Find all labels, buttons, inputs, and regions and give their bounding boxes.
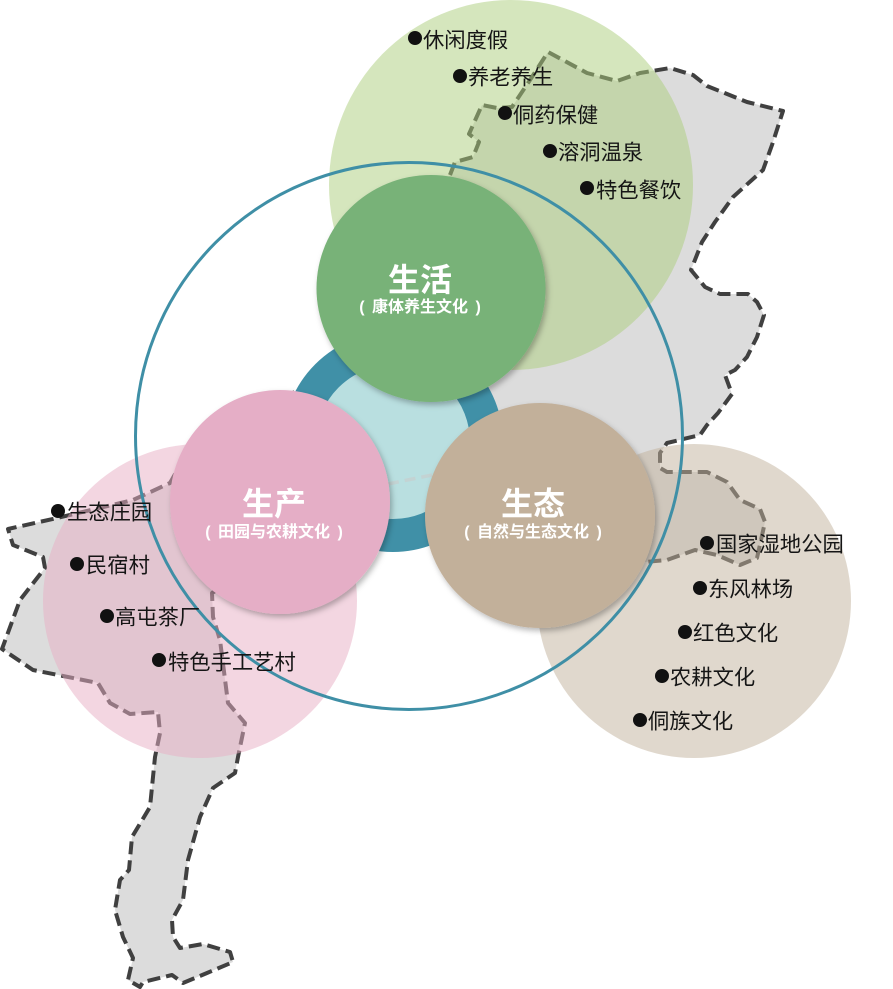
pink main circle: [170, 390, 390, 614]
list: ecology items: 侗族文化: [648, 710, 733, 734]
list: ecology items: [633, 532, 844, 734]
subheading: 田园与农耕文化: ( 田园与农耕文化 ): [205, 522, 343, 541]
list: living items: 溶洞温泉: [558, 140, 643, 164]
large teal ring: [136, 162, 682, 710]
list: living items: 休闲度假: [423, 28, 508, 52]
light pink circle: production zone: [43, 444, 357, 758]
central teal ring and disc: [300, 348, 486, 536]
list: living items: 特色餐饮: [596, 178, 681, 202]
heading: 生活: 生活: [388, 262, 452, 298]
list: ecology items: 国家湿地公园: [716, 532, 844, 556]
list: living items: 侗药保健: [513, 104, 598, 128]
tan main circle: [425, 403, 655, 628]
heading: 生产: 生产: [242, 486, 306, 522]
green main circle: [316, 175, 546, 402]
list: production items: 民宿村: [86, 554, 150, 578]
list: production items: 生态庄园: [67, 500, 152, 524]
list: production items: 高屯茶厂: [115, 606, 200, 630]
list: living items: 养老养生: [468, 66, 553, 90]
list: ecology items: 红色文化: [693, 622, 778, 646]
subheading: 自然与生态文化: ( 自然与生态文化 ): [464, 522, 602, 541]
subheading: 康体养生文化: ( 康体养生文化 ): [359, 297, 481, 316]
list: production items: [51, 500, 296, 674]
light tan circle: ecology zone: [537, 444, 851, 758]
list: ecology items: 农耕文化: [670, 666, 755, 690]
list: ecology items: 东风林场: [708, 578, 793, 602]
heading: 生态: 生态: [501, 486, 565, 522]
list: production items: 特色手工艺村: [168, 650, 296, 674]
light green circle: living zone: [329, 0, 693, 370]
list: living items: [408, 28, 681, 202]
